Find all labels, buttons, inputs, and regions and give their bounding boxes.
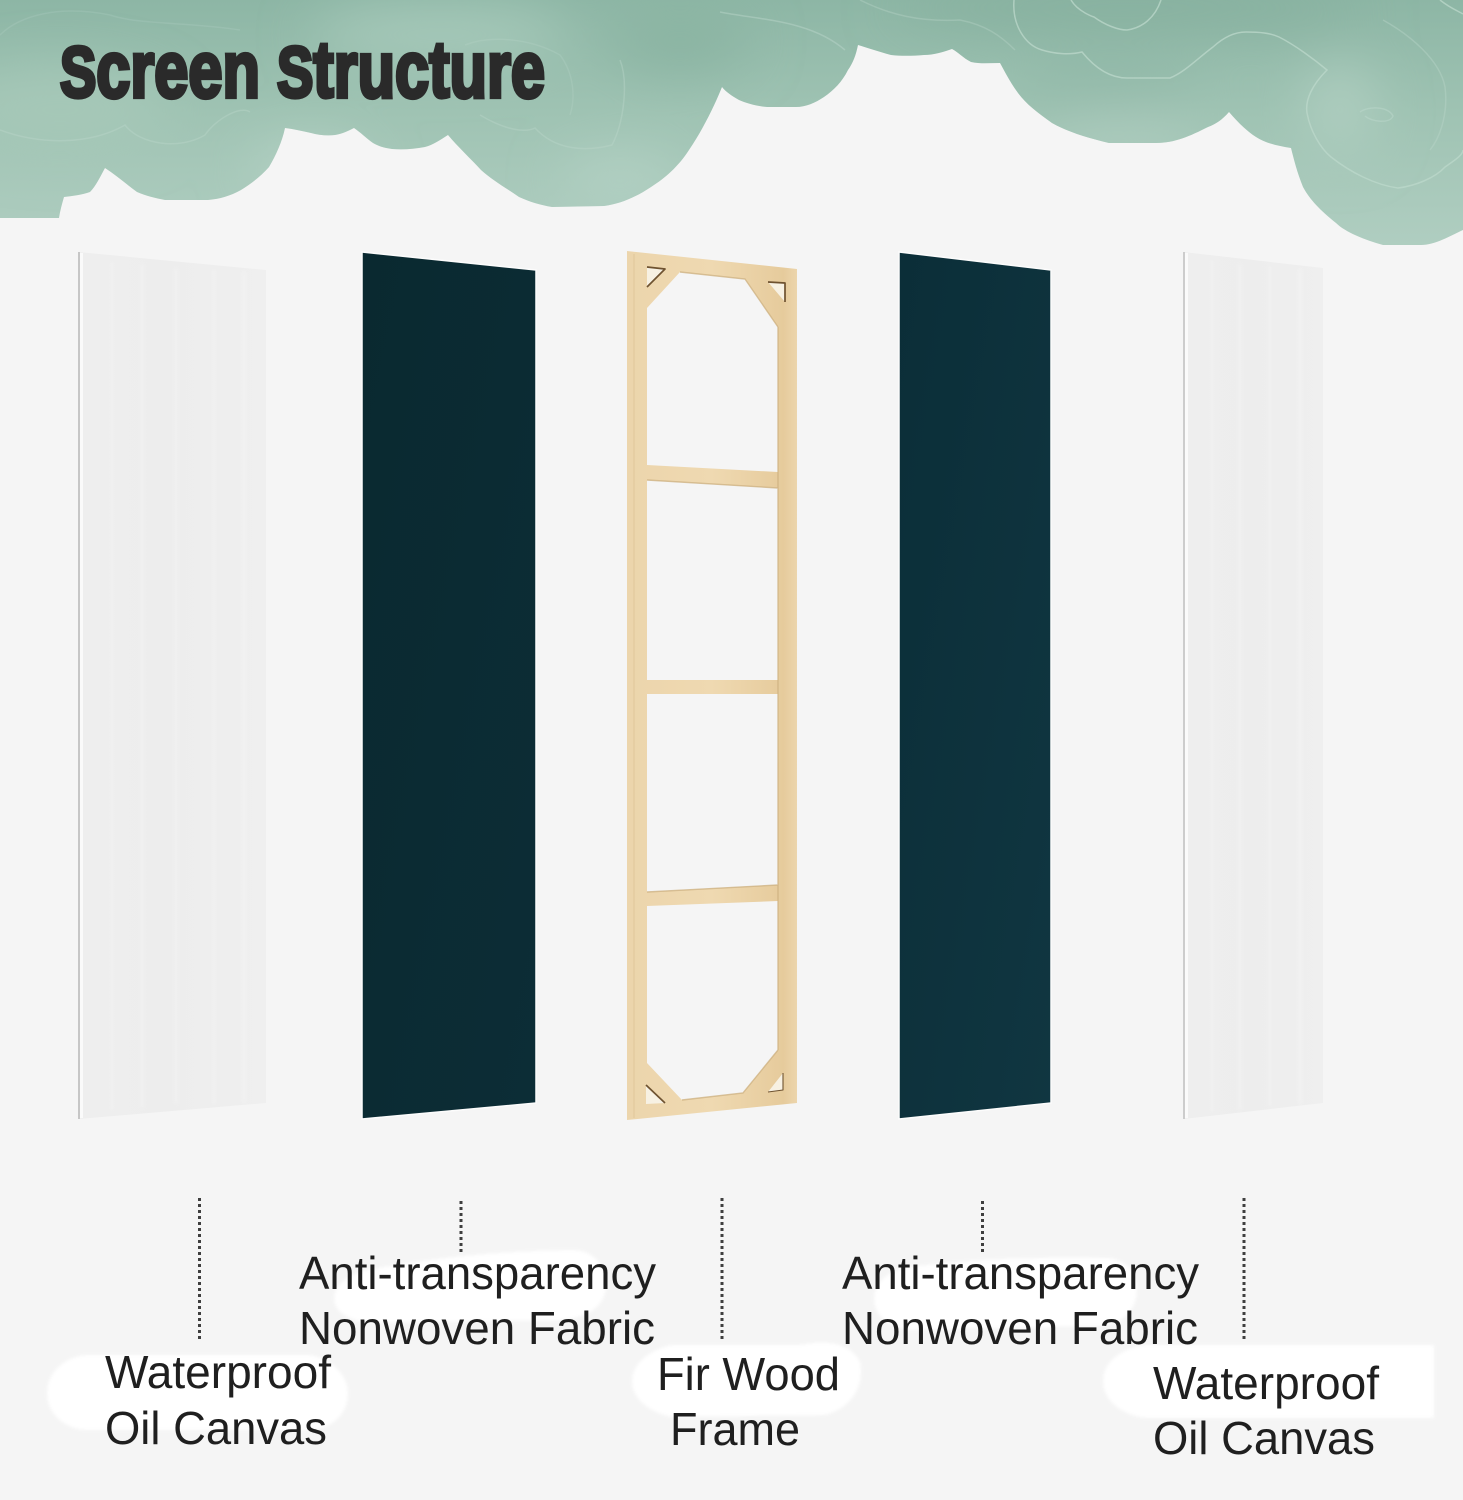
corner bracket slots <box>646 267 785 1104</box>
label: left anti-transparency nonwoven fabric: Anti-transparency <box>299 1247 656 1299</box>
label: right anti-transparency nonwoven fabric: Nonwoven Fabric <box>842 1302 1198 1354</box>
label: right anti-transparency nonwoven fabric <box>842 1247 1199 1354</box>
label: fir wood frame: Frame <box>670 1403 800 1455</box>
label: fir wood frame <box>657 1348 840 1455</box>
label: right anti-transparency nonwoven fabric: Anti-transparency <box>842 1247 1199 1299</box>
label: left waterproof oil canvas <box>105 1346 331 1454</box>
label: right waterproof oil canvas: Oil Canvas <box>1153 1412 1375 1464</box>
label: left waterproof oil canvas: Waterproof <box>105 1346 331 1398</box>
label: right waterproof oil canvas <box>1153 1357 1379 1464</box>
green cloud header banner <box>0 0 1463 250</box>
label: left anti-transparency nonwoven fabric: Nonwoven Fabric <box>299 1302 655 1354</box>
panel: left anti-transparency nonwoven fabric <box>362 252 536 1119</box>
panel: left waterproof oil canvas <box>78 252 266 1119</box>
frame shading on inner edges <box>634 254 778 1118</box>
panel: right anti-transparency nonwoven fabric <box>899 252 1051 1119</box>
label: left anti-transparency nonwoven fabric <box>299 1247 656 1354</box>
dotted leader lines <box>200 1198 1244 1339</box>
panel: fir wood frame <box>627 251 797 1120</box>
panel: right waterproof oil canvas <box>1183 252 1323 1119</box>
label: fir wood frame: Fir Wood <box>657 1348 840 1400</box>
label: left waterproof oil canvas: Oil Canvas <box>105 1402 327 1454</box>
title: Screen Structure <box>60 25 545 114</box>
white label highlight blobs <box>47 1250 1434 1430</box>
label: right waterproof oil canvas: Waterproof <box>1153 1357 1379 1409</box>
